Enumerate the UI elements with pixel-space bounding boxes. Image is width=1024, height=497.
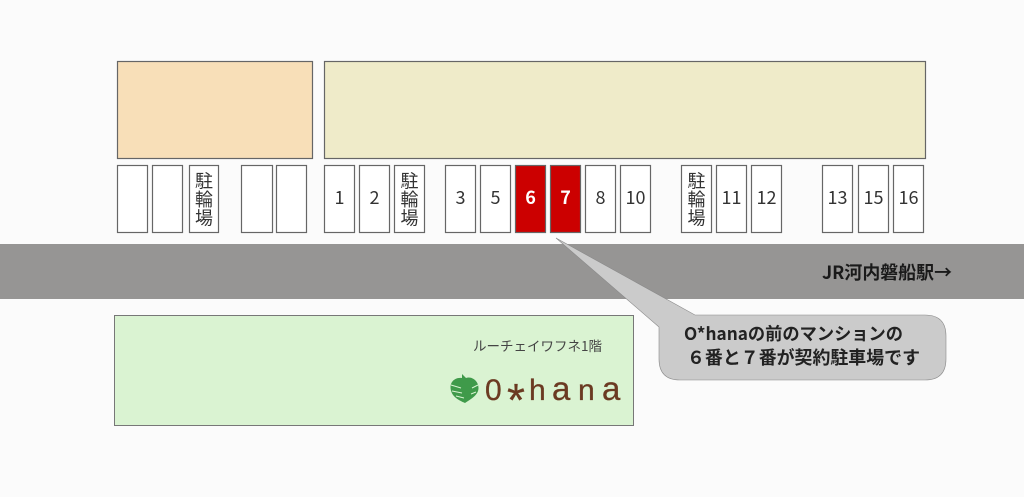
logo text: *: [507, 374, 525, 426]
space 3: 3: [456, 184, 466, 210]
callout line 1: O*hanaの前のマンションの: [684, 321, 903, 346]
bicycle parking 3: 駐: [688, 168, 706, 194]
space 5: 5: [490, 184, 500, 210]
blank space 2: [152, 166, 182, 232]
space 6 highlighted: 6: [525, 184, 536, 210]
road: [0, 244, 1024, 299]
space 3: [446, 166, 476, 232]
space 11: 11: [722, 184, 741, 210]
bicycle parking 1: [190, 166, 218, 232]
space 12: 12: [757, 184, 776, 210]
logo text: a: [552, 370, 571, 407]
blank space 3: [242, 166, 272, 232]
space 5: [480, 166, 510, 232]
space 13: [822, 166, 852, 232]
logo text: [485, 370, 621, 426]
shop panel: [114, 316, 634, 426]
blank space 1: [118, 166, 148, 232]
bicycle parking 2: 輪: [400, 186, 418, 212]
building: apartment: [324, 62, 926, 158]
space 10: 10: [626, 184, 645, 210]
parking row: [118, 166, 924, 232]
callout line 2: ６番と７番が契約駐車場です: [687, 344, 920, 370]
bicycle parking 2: [394, 166, 424, 232]
space 15: 15: [864, 184, 883, 210]
space 7 highlighted: 7: [560, 184, 571, 210]
bicycle parking 2: 駐: [400, 168, 418, 194]
space 12: [752, 166, 782, 232]
address label: ルーチェイワフネ1階: [473, 335, 602, 355]
space 1: [324, 166, 354, 232]
logo text: a: [602, 370, 621, 407]
callout: [556, 238, 946, 380]
space 7 highlighted: [550, 166, 580, 232]
icon: monstera leaf: [450, 374, 478, 403]
space 2: 2: [370, 184, 380, 210]
blank space 4: [276, 166, 306, 232]
space 1: 1: [334, 184, 344, 210]
logo text: n: [578, 374, 595, 407]
space 6 highlighted: [516, 166, 546, 232]
space 8: [586, 166, 616, 232]
space 16: [894, 166, 924, 232]
bicycle parking 1: 場: [195, 204, 213, 230]
space 13: 13: [828, 184, 847, 210]
space 15: [858, 166, 888, 232]
bicycle parking 1: 輪: [195, 186, 213, 212]
station direction label: JR河内磐船駅→: [822, 259, 952, 285]
bicycle parking 3: [682, 166, 712, 232]
bicycle parking 3: 輪: [688, 186, 706, 212]
logo text: 0: [485, 374, 502, 407]
bicycle parking 2: 場: [400, 204, 418, 230]
building: orange: [118, 62, 312, 158]
space 8: 8: [596, 184, 606, 210]
space 2: [360, 166, 390, 232]
bicycle parking 1: 駐: [195, 168, 213, 194]
logo text: h: [529, 374, 546, 407]
space 11: [716, 166, 746, 232]
space 10: [620, 166, 650, 232]
space 16: 16: [899, 184, 918, 210]
bicycle parking 3: 場: [688, 204, 706, 230]
